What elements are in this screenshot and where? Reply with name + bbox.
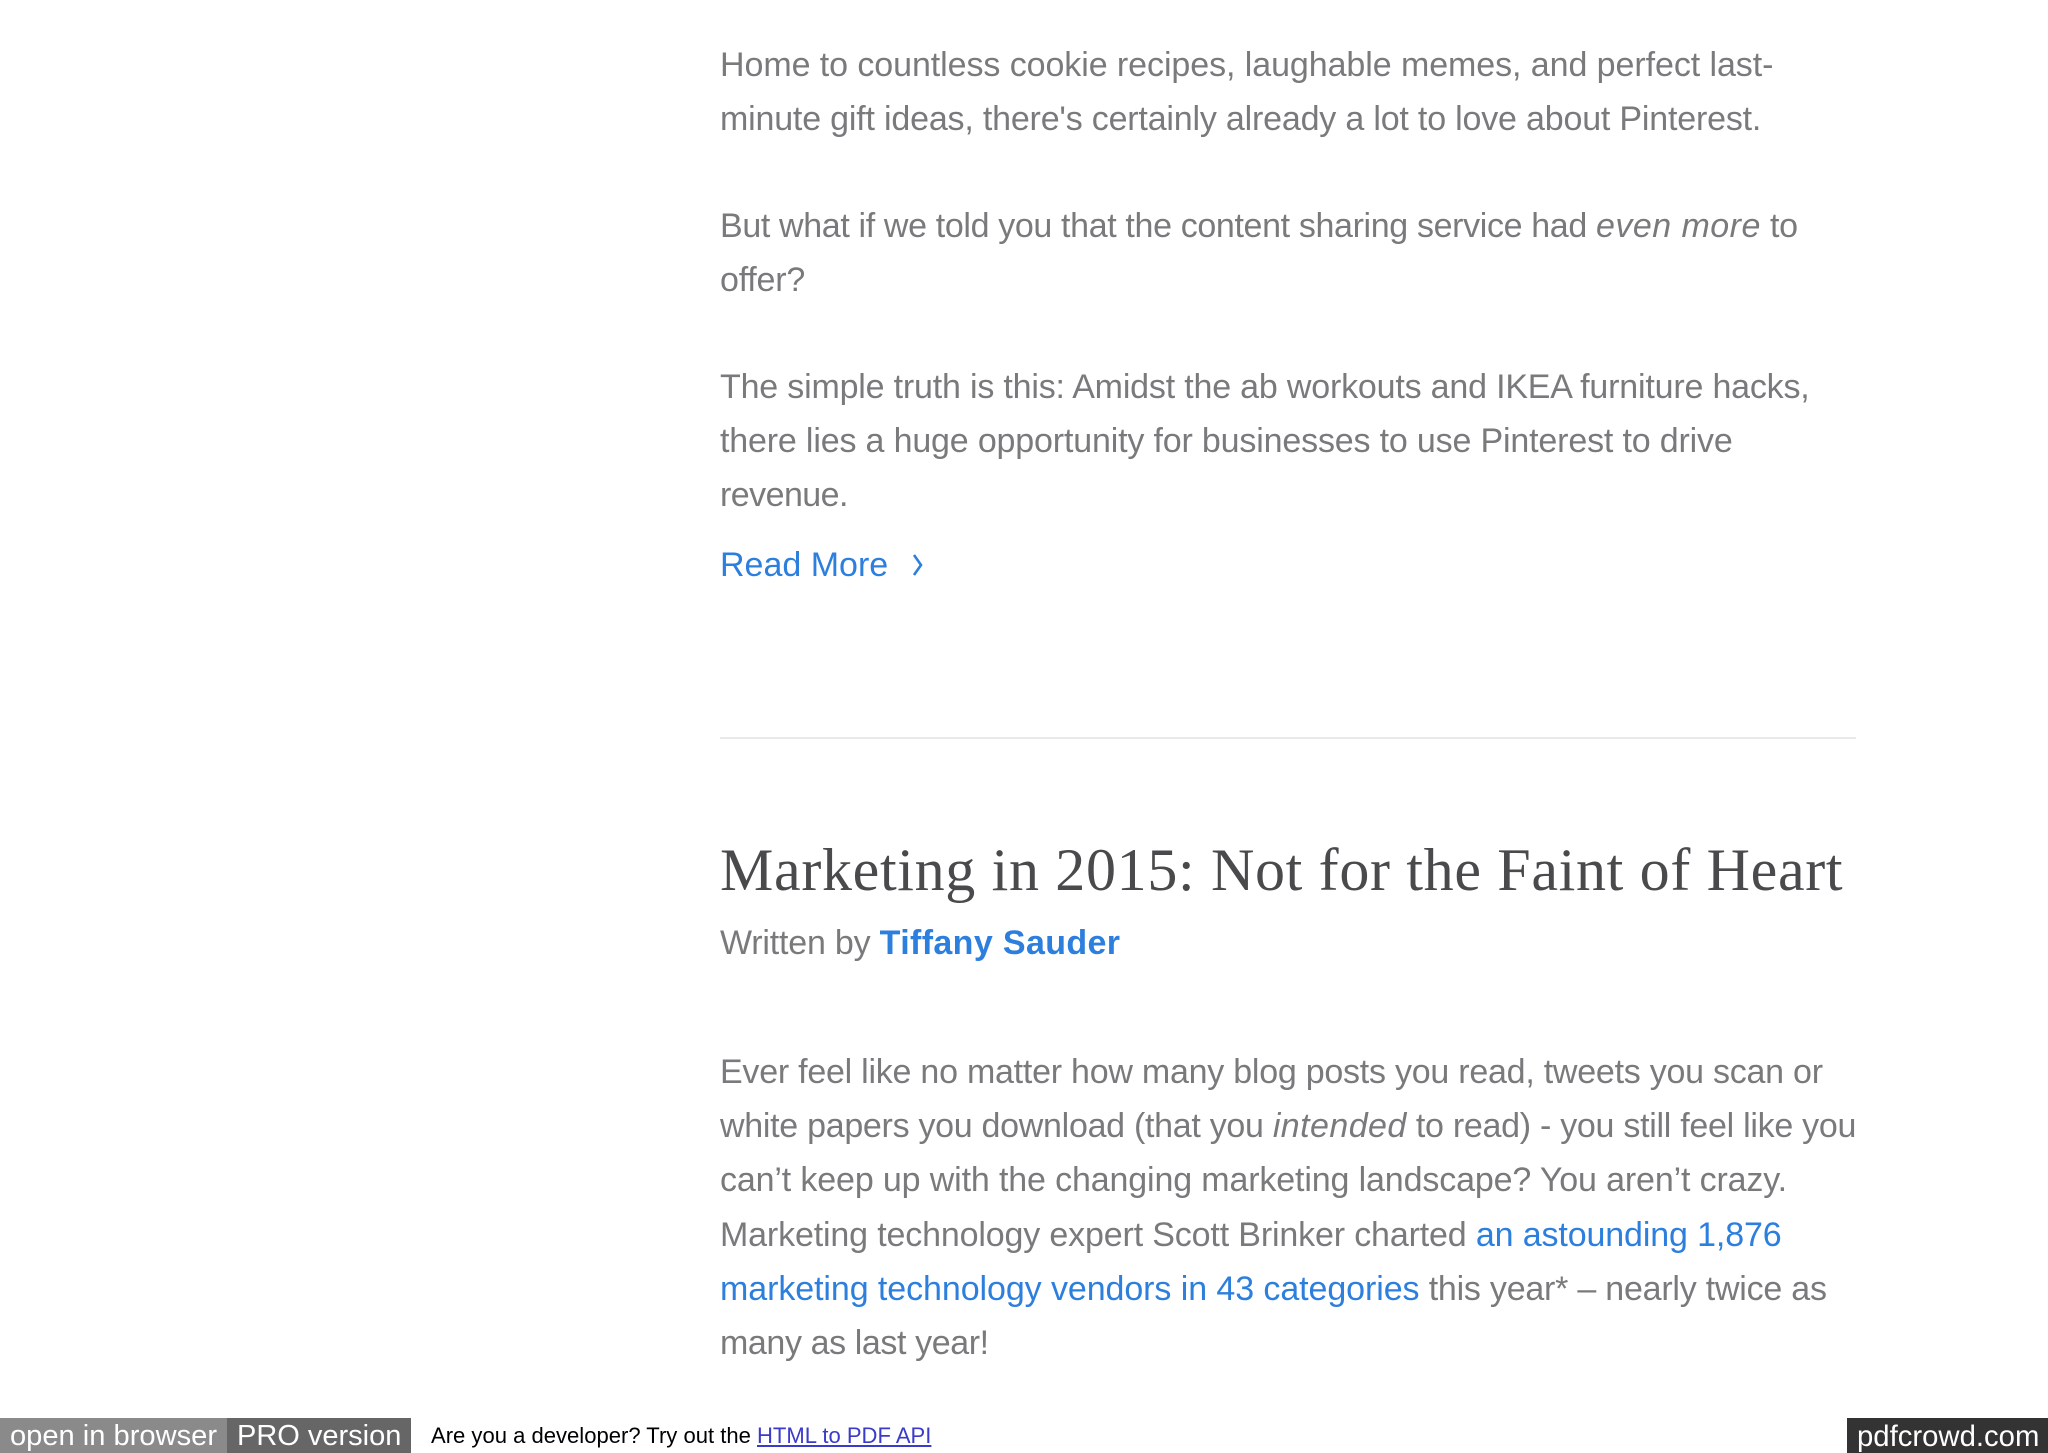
paragraph: marketing landscape	[720, 1053, 1856, 1362]
paragraph: simple truth: there lies a huge opportunity for businesses to use Pinterest to drive	[720, 422, 1733, 460]
paragraph: marketing landscape: Ever feel like no matter how many blog posts you read, tweets you scan or	[720, 1053, 1823, 1091]
text: developer prompt: Are you a developer? Try out the HTML to PDF API	[431, 1423, 931, 1448]
paragraph: even more	[720, 207, 1798, 299]
paragraph: even more: But what if we told you that the content sharing service had even more to	[720, 207, 1798, 245]
paragraph: marketing landscape: white papers you download (that you intended to read) - you still feel like you	[720, 1107, 1856, 1145]
paragraph: simple truth	[720, 368, 1810, 514]
paragraph: marketing landscape: marketing technology vendors in 43 categories this year* – nearly twice as	[720, 1270, 1827, 1308]
paragraph: intro: minute gift ideas, there's certainly already a lot to love about Pinterest.	[720, 100, 1761, 138]
byline: Written by Tiffany Sauder	[720, 924, 1120, 962]
paragraph: simple truth: The simple truth is this: Amidst the ab workouts and IKEA furniture hacks,	[720, 368, 1810, 406]
paragraph: marketing landscape: many as last year!	[720, 1324, 989, 1362]
paragraph: intro	[720, 46, 1773, 138]
link: read more with chevron: Read More	[720, 546, 888, 584]
divider	[720, 737, 1856, 739]
text block: Pinterest article teaser	[720, 46, 1810, 584]
paragraph: marketing landscape: can’t keep up with the changing marketing landscape? You aren’t crazy.	[720, 1161, 1787, 1199]
icon: chevron	[913, 554, 922, 576]
paragraph: intro: Home to countless cookie recipes, laughable memes, and perfect last-	[720, 46, 1773, 84]
button: PRO version: PRO version	[237, 1420, 401, 1452]
paragraph: even more: offer?	[720, 261, 805, 299]
button: open in browser: open in browser	[10, 1420, 217, 1452]
paragraph: simple truth: revenue.	[720, 476, 848, 514]
badge: pdfcrowd.com: pdfcrowd.com	[1857, 1420, 2039, 1453]
paragraph: marketing landscape: Marketing technology expert Scott Brinker charted an astounding 1,876	[720, 1216, 1782, 1254]
footer bar: pdfcrowd	[0, 1418, 2048, 1453]
heading: article title: Marketing in 2015: Not for the Faint of Heart	[720, 837, 1843, 903]
